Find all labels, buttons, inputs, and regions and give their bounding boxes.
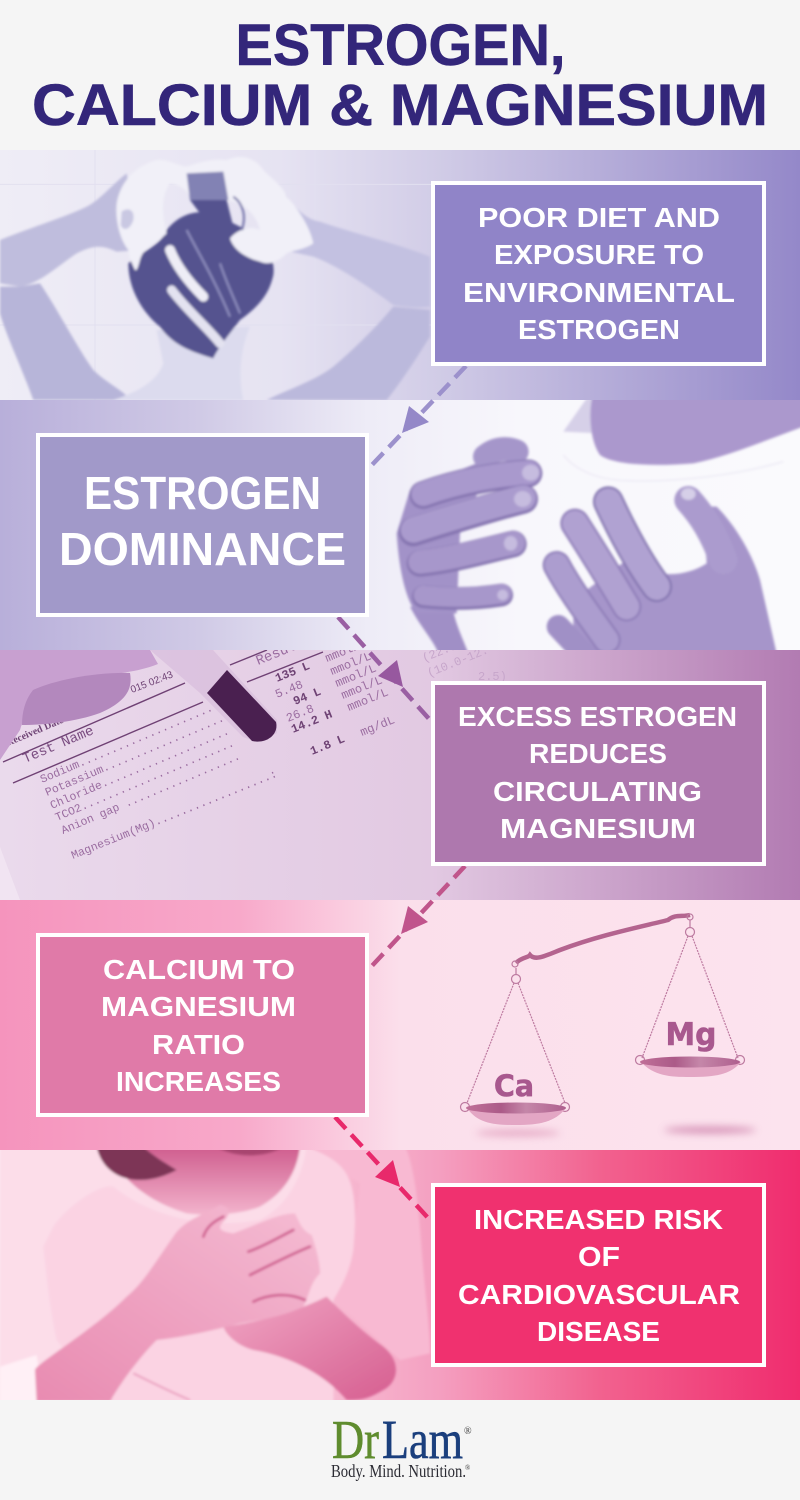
photo: blood test report and tube: Chloride.................... [48, 725, 231, 813]
photo: blood test report and tube: mmol/L [328, 650, 374, 679]
box 1: EXPOSURE TO [494, 239, 704, 270]
band 1: shampoo photo [0, 150, 800, 400]
title: ESTROGEN, [236, 13, 566, 78]
logo: Dr Lam: ® [465, 1464, 471, 1472]
box 1 [433, 183, 764, 364]
box 3: MAGNESIUM [500, 813, 696, 844]
box 5: DISEASE [537, 1316, 660, 1347]
photo: blood test report and tube: 1.8 L [308, 732, 347, 759]
band 4: scale [0, 900, 800, 1150]
photo: blood test report and tube: Received Date [5, 715, 66, 749]
photo: woman washing hair [0, 150, 433, 400]
photo: hands on chest [397, 397, 800, 657]
photo: blood test report and tube: 14.2 H [289, 708, 335, 737]
photo: blood test report and tube [0, 636, 507, 900]
box 2: ESTROGEN [84, 467, 321, 519]
box 1: ENVIRONMENTAL [463, 277, 735, 308]
photo: blood test report and tube: (22.0 [420, 639, 459, 666]
box 1: POOR DIET AND [478, 202, 720, 233]
photo: blood test report and tube: Result [254, 636, 307, 670]
box 4 [38, 935, 367, 1115]
box 5: INCREASED RISK [474, 1204, 723, 1235]
box 3: REDUCES [529, 738, 667, 769]
box 4: INCREASES [116, 1066, 281, 1097]
arrow 4 [335, 1117, 430, 1220]
box 3: EXCESS ESTROGEN [458, 701, 737, 732]
photo: blood test report and tube: 26.8 [284, 702, 316, 726]
box 2 [38, 435, 367, 615]
photo: blood test report and tube: mmol/L [339, 674, 385, 703]
box 4: RATIO [152, 1029, 245, 1060]
photo: blood test report and tube: (10.0-12. [425, 643, 491, 681]
box 3 [433, 683, 764, 864]
band 3: lab report photo [0, 636, 800, 900]
photo: blood test report and tube: mmol/L [345, 686, 391, 715]
box 5: OF [578, 1241, 620, 1272]
photo: blood test report and tube: TCO2........................ [53, 737, 236, 825]
photo: blood test report and tube: 2.5) [478, 670, 507, 684]
box 4: MAGNESIUM [101, 991, 296, 1022]
arrow 3 [370, 866, 465, 968]
photo: blood test report and tube: Potassium................... [43, 712, 226, 800]
arrow 2 [338, 617, 430, 720]
photo: balance scale with Ca and Mg [460, 914, 756, 1136]
photo: blood test report and tube: 5.48 [273, 678, 305, 702]
band 5: chest pain photo [0, 1147, 800, 1403]
photo: blood test report and tube: Test Name [21, 723, 97, 768]
photo: blood test report and tube: Magnesium(Mg)..................: [70, 768, 279, 863]
photo: blood test report and tube: 015 02:43 [129, 669, 175, 696]
photo: balance scale with Ca and Mg: Ca [494, 1069, 534, 1103]
photo: blood test report and tube: Anion gap .................. [59, 750, 242, 838]
logo: Dr Lam: Lam [382, 1409, 463, 1470]
photo: balance scale with Ca and Mg: Mg [666, 1017, 716, 1053]
photo: blood test report and tube: 135 L [273, 659, 312, 686]
photo: blood test report and tube: mg/dL [358, 713, 397, 740]
arrow 1 [370, 366, 466, 467]
logo: Dr Lam [331, 1409, 472, 1481]
title [32, 13, 768, 138]
box 3: CIRCULATING [493, 776, 702, 807]
photo: blood test report and tube: 94 L [291, 685, 323, 709]
box 2: DOMINANCE [59, 523, 346, 575]
box 4: CALCIUM TO [103, 954, 295, 985]
box 5 [433, 1185, 764, 1365]
photo: woman holding chest [0, 1147, 430, 1403]
band 2: breast photo [0, 397, 800, 657]
box 1: ESTROGEN [518, 314, 680, 345]
logo: Dr Lam: Dr [332, 1409, 379, 1470]
photo: blood test report and tube: mmol/L [333, 662, 379, 691]
logo: Dr Lam: Body. Mind. Nutrition. [331, 1461, 466, 1481]
photo: blood test report and tube: mmol/L [323, 637, 369, 666]
logo: Dr Lam: ® [464, 1426, 472, 1437]
title: CALCIUM & MAGNESIUM [32, 73, 768, 138]
photo: blood test report and tube: Sodium..................... [38, 702, 215, 787]
box 5: CARDIOVASCULAR [458, 1279, 740, 1310]
